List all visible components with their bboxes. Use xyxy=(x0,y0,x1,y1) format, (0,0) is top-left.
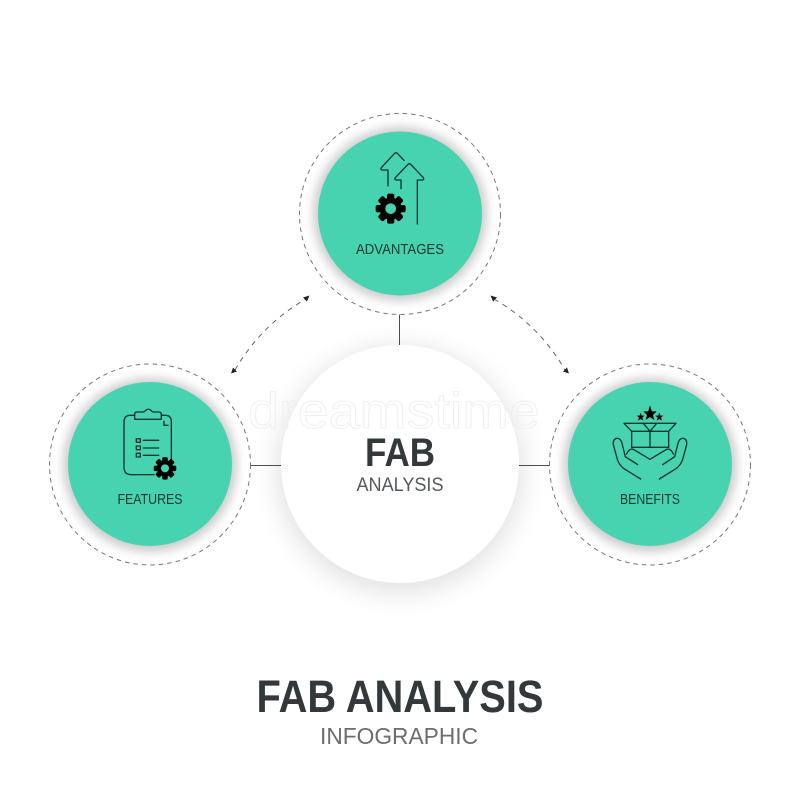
title: FAB ANALYSIS xyxy=(256,671,544,722)
panel: benefits xyxy=(550,364,750,565)
label: BENEFITS: BENEFITS xyxy=(620,492,680,508)
dashed arrow: features to advantages xyxy=(231,296,310,374)
label: ADVANTAGES: ADVANTAGES xyxy=(356,242,444,258)
icon: arrows and gear xyxy=(376,153,424,224)
panel: features xyxy=(50,364,250,565)
icon: box in hands with stars xyxy=(613,405,687,479)
label: FEATURES: FEATURES xyxy=(118,492,182,508)
heading: FAB: FAB xyxy=(365,431,435,475)
panel: advantages xyxy=(300,114,500,314)
watermark: dreamstime xyxy=(248,383,540,439)
icon: clipboard and gear xyxy=(124,409,176,480)
dashed arrow: advantages to benefits xyxy=(490,296,569,374)
subtitle: INFOGRAPHIC xyxy=(320,723,478,749)
panel: center circle xyxy=(248,345,540,592)
connector lines xyxy=(248,314,551,466)
sub-heading: ANALYSIS: ANALYSIS xyxy=(356,474,444,496)
